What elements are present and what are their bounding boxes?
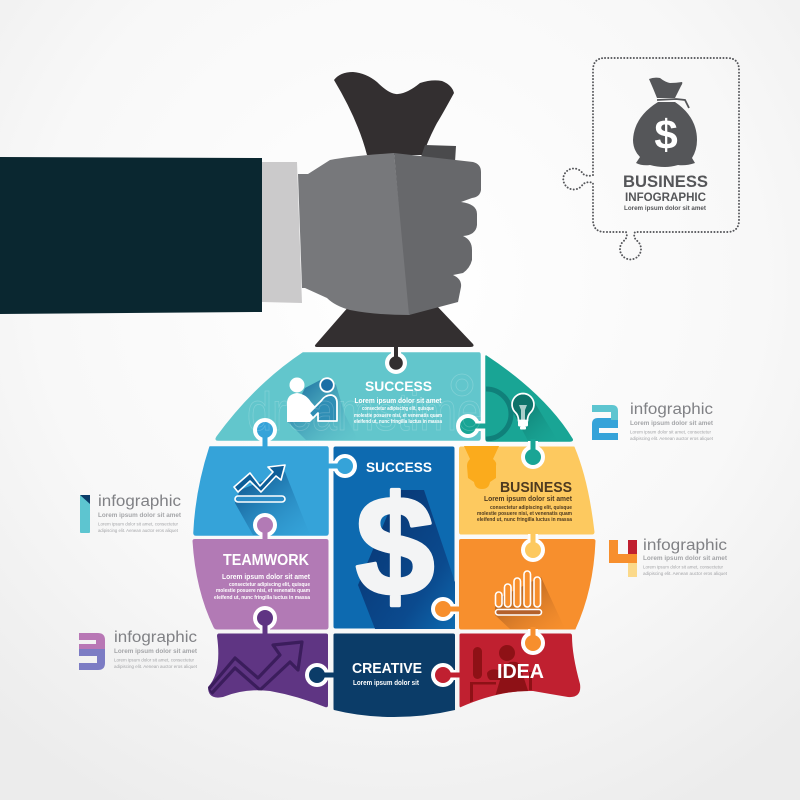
tab: green into teal bbox=[456, 414, 488, 438]
tab: bag knot into teal bbox=[385, 345, 407, 374]
text block: business body: molestie posuere nisi, et venenatis quam bbox=[477, 511, 572, 517]
text block: business body: eleifend ut, nunc fringilla luctus in massa bbox=[477, 517, 572, 523]
back of the hand bbox=[298, 153, 410, 315]
icon: money bag bbox=[633, 78, 697, 167]
icon: number 2 bbox=[592, 405, 618, 440]
text block: teamwork body bbox=[214, 572, 310, 601]
label 2 bbox=[592, 401, 714, 442]
panel: teal success piece bbox=[216, 353, 480, 440]
heading: creative: CREATIVE bbox=[352, 661, 422, 677]
icon: person at desk bbox=[470, 645, 532, 708]
text block: Lorem ipsum dolor sit amet, consectetur bbox=[643, 564, 723, 570]
text block: Lorem ipsum dolor sit amet bbox=[630, 420, 714, 427]
icon: light bulb bbox=[511, 392, 547, 440]
text block: success body: Lorem ipsum dolor sit amet bbox=[354, 396, 442, 405]
money bag neck top bbox=[334, 72, 454, 155]
heading: infographic: infographic bbox=[643, 537, 727, 554]
text block: Lorem ipsum dolor sit amet bbox=[114, 648, 198, 655]
fist bbox=[298, 153, 481, 315]
callout: business infographic logo bbox=[563, 58, 739, 259]
heading: infographic: infographic bbox=[98, 493, 181, 510]
panel: green idea piece bbox=[485, 355, 573, 442]
tab: blue into teal bbox=[253, 418, 277, 448]
icon: bulb silhouette bbox=[464, 446, 499, 489]
icon: number 3 bbox=[79, 633, 105, 670]
panel: purple arrow piece bbox=[208, 634, 328, 707]
thumb bbox=[420, 145, 456, 162]
shirt cuff bbox=[262, 162, 302, 303]
text block: business body bbox=[477, 494, 572, 523]
panel: blue chart piece bbox=[194, 447, 328, 535]
heading: teamwork: TEAMWORK bbox=[223, 552, 310, 569]
text block bbox=[98, 512, 182, 534]
text block: Lorem ipsum dolor sit amet bbox=[98, 512, 182, 519]
panel: lilac teamwork piece bbox=[193, 540, 328, 629]
text block: Lorem ipsum dolor sit amet, consectetur bbox=[630, 430, 711, 436]
text block bbox=[643, 555, 728, 577]
text block: adipiscing elit. Aenean auctor eros aliquet bbox=[114, 664, 198, 670]
suit sleeve bbox=[0, 157, 262, 314]
panel: dark blue dollar piece bbox=[334, 446, 455, 629]
icon: number 4 bbox=[609, 540, 637, 577]
icon: rising arrow bbox=[208, 642, 302, 693]
heading: success: SUCCESS bbox=[365, 378, 432, 394]
tab: green into yellow bbox=[521, 439, 545, 469]
text block: Lorem ipsum dolor sit amet, consectetur bbox=[98, 522, 178, 528]
text block: Lorem ipsum dolor sit amet bbox=[643, 555, 728, 562]
text block: teamwork body: consectetur adipiscing elit, quisque bbox=[229, 582, 310, 588]
icon: dollar sign: $ bbox=[356, 467, 434, 626]
fingers bbox=[394, 153, 481, 315]
dotted puzzle outline bbox=[563, 58, 739, 259]
icon: handshake bbox=[287, 377, 358, 440]
icon: number 1 bbox=[80, 495, 90, 533]
text block: adipiscing elit. Aenean auctor eros aliquet bbox=[643, 571, 728, 577]
money bag knot bottom bbox=[315, 305, 474, 347]
dollar long shadow bbox=[358, 490, 455, 629]
text block: teamwork body: Lorem ipsum dolor sit amet bbox=[222, 572, 310, 581]
text block bbox=[630, 420, 714, 442]
heading: infographic: infographic bbox=[114, 629, 197, 646]
text block: business body: consectetur adipiscing elit, quisque bbox=[490, 505, 572, 511]
text block: creative body: Lorem ipsum dolor sit bbox=[353, 678, 419, 687]
text block: teamwork body: molestie posuere nisi, et venenatis quam bbox=[216, 588, 310, 594]
tab: red into navy bbox=[431, 663, 461, 687]
heading: business: BUSINESS bbox=[500, 479, 572, 496]
icon: rising line bbox=[234, 465, 310, 535]
text block: adipiscing elit. Aenean auctor eros aliquet bbox=[630, 436, 714, 442]
tab: purple into lilac bbox=[253, 606, 277, 635]
text block: success body: consectetur adipiscing elit, quisque bbox=[362, 406, 434, 412]
tab: yellow into orange bbox=[521, 532, 545, 562]
decorative dark ring bbox=[486, 386, 514, 441]
icon: money bag: $ bbox=[654, 111, 678, 158]
panel: red idea piece bbox=[460, 634, 580, 708]
tab: orange into red bbox=[521, 627, 545, 655]
label 4 bbox=[609, 537, 728, 577]
icon: bar chart bbox=[495, 571, 565, 629]
text block: success body: molestie posuere nisi, et venenatis quam bbox=[354, 413, 442, 419]
label 3 bbox=[79, 629, 198, 670]
heading: idea: IDEA bbox=[497, 661, 544, 683]
text block: teamwork body: eleifend ut, nunc fringilla luctus in massa bbox=[214, 595, 310, 601]
panel: orange chart piece bbox=[460, 540, 595, 629]
text block bbox=[114, 648, 198, 670]
heading: business: BUSINESS bbox=[623, 173, 708, 191]
text block: success body: eleifend ut, nunc fringilla luctus in massa bbox=[354, 419, 442, 425]
text block: adipiscing elit. Aenean auctor eros aliquet bbox=[98, 528, 179, 534]
tab: blue into dark blue bbox=[326, 454, 357, 478]
text block: Lorem ipsum dolor sit amet, consectetur bbox=[114, 658, 194, 664]
watermark: dreamstime bbox=[247, 382, 482, 442]
heading: infographic: infographic bbox=[630, 401, 713, 418]
tagline: Lorem ipsum dolor sit amet bbox=[624, 205, 707, 212]
heading: success: SUCCESS bbox=[366, 459, 432, 475]
text block: success body bbox=[354, 396, 442, 425]
tab: navy into purple bbox=[305, 663, 335, 687]
tab: lilac into blue bbox=[253, 513, 277, 541]
panel: yellow business piece bbox=[460, 446, 594, 534]
subheading: infographic: INFOGRAPHIC bbox=[625, 190, 706, 204]
label 1 bbox=[80, 493, 182, 534]
panel: navy creative piece bbox=[334, 634, 455, 717]
connector tabs bbox=[253, 345, 545, 687]
text block: business body: Lorem ipsum dolor sit amet bbox=[484, 494, 572, 503]
tab: orange into dark blue bbox=[431, 597, 461, 621]
